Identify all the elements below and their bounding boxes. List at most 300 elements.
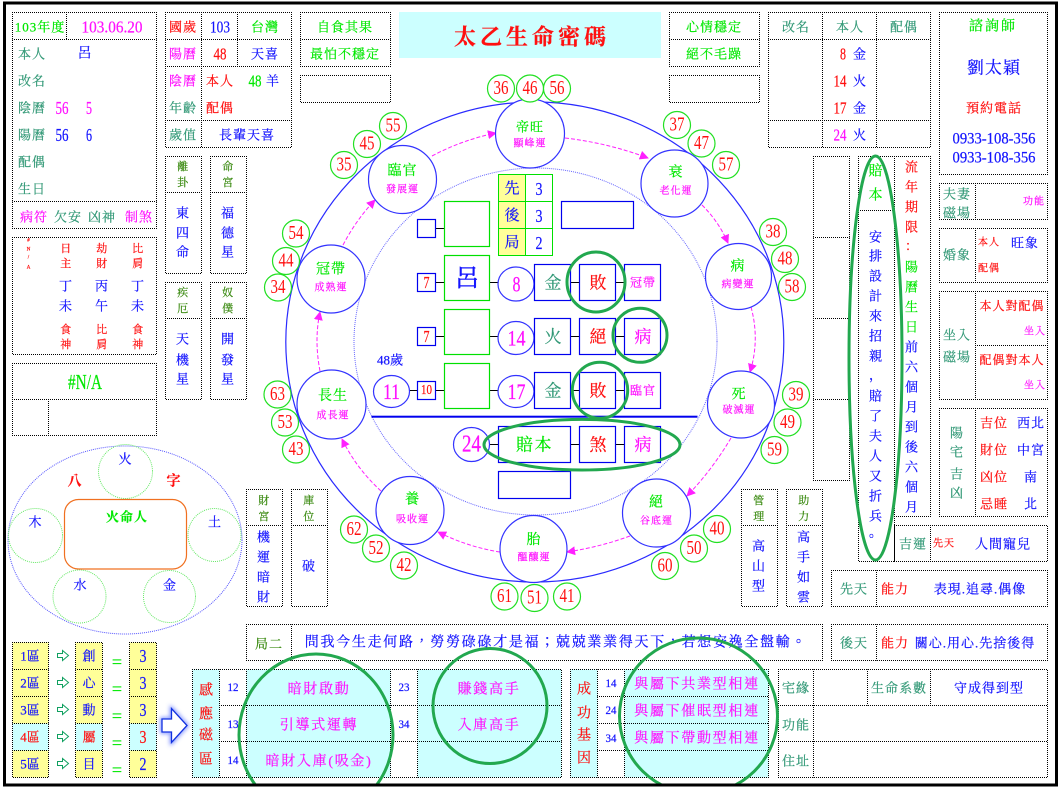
row: 48歲 11 10 17 金 敗 臨官 [374, 352, 660, 408]
panel: 離卦: 卦 [177, 175, 189, 189]
chart: five elements: 土 [208, 514, 222, 530]
row: 48歲 11 10 17 金 敗 臨官: 48歲 [377, 352, 403, 368]
panel: 自食其果: 自食其果 [317, 20, 373, 34]
highlight ovals center [484, 252, 680, 470]
panel: annual period [894, 156, 930, 516]
empty box under row [498, 472, 570, 498]
table: response magnetic zone: 磁 [199, 728, 214, 744]
panel: 助力: 高 [797, 530, 811, 544]
panel: couple field: 夫妻 [943, 186, 971, 202]
panel: innate ability [832, 570, 1048, 606]
panel: consultant: 預約電話 [966, 100, 1022, 116]
panel: lose capital verdict [858, 156, 894, 562]
panel: 疾厄: 天 [176, 332, 190, 346]
table: zones: 心 [82, 676, 96, 690]
panel: life poem: 局二 [255, 636, 283, 652]
panel: acquired ability: 後天 [840, 636, 868, 650]
icon: big blue arrow [162, 708, 187, 742]
panel: personal info: 6 [86, 125, 92, 145]
panel: personal info: 制煞 [125, 210, 153, 224]
panel: 庫位: 位 [303, 510, 315, 523]
panel: four pillars: 劫 [96, 241, 108, 255]
panel: acquired ability: 關心.用心.先捨後得 [915, 636, 1035, 650]
panel: innate ability: 表現.追尋.偶像 [934, 582, 1026, 596]
age number badges: 34 [270, 276, 286, 298]
panel: house luck: 吉 [950, 466, 964, 482]
panel: lose capital verdict: 親 [869, 348, 883, 364]
table: zones: 3 [140, 673, 146, 693]
panel: 心情穩定: 心情穩定 [686, 20, 742, 34]
panel: 奴僕: 僕 [222, 301, 234, 315]
stage: 病: 病變運 [722, 278, 754, 290]
panel: lose capital verdict: 人 [869, 448, 883, 464]
panel: 財宮: 機 [257, 530, 271, 544]
table: zones: = [112, 706, 122, 726]
panel: annual period: 期 [905, 200, 919, 214]
row: 呂 8 金 敗 冠帶: 敗 [590, 274, 606, 292]
age number badges: 61 [497, 585, 512, 607]
panel: personal info: 陰曆 [18, 100, 46, 116]
stage: 長生: 長生 [318, 387, 348, 404]
panel: annual period: 月 [905, 500, 919, 514]
panel: entry field [940, 292, 1048, 400]
table: house and life coefficient [778, 670, 1048, 778]
panel: 命宮: 宮 [222, 176, 234, 189]
table: response magnetic zone: 13 [228, 717, 238, 731]
age number badges: 53 [278, 411, 292, 433]
panel: four pillars: 主 [60, 257, 72, 270]
stage: 絕: 谷底運 [640, 514, 673, 527]
age number badges: 57 [718, 154, 734, 176]
panel: 管理: 高 [752, 538, 766, 554]
chart: five elements: 火命人 [106, 510, 148, 524]
panel: personal info: 欠安 [54, 210, 82, 224]
panel: annual period: 流 [905, 160, 919, 174]
panel: acquired ability: 能力 [881, 636, 909, 650]
panel: lose capital verdict: 又 [869, 468, 883, 484]
panel: name numbers table: 金 [853, 100, 867, 116]
panel: 離卦: 命 [176, 244, 190, 260]
row: 呂 8 金 敗 冠帶: 金 [544, 274, 562, 292]
panel: lose capital verdict: 設 [869, 268, 883, 284]
table: 先後局: 局 [504, 234, 520, 251]
panel: 命宮: 命 [222, 159, 234, 173]
panel: lose capital verdict: 計 [869, 288, 883, 304]
panel: 心情穩定 [670, 12, 760, 66]
table: zones: 創 [82, 648, 96, 664]
table: house and life coefficient: 生命系數 [871, 680, 927, 696]
row: 14 火 絕 病: 火 [544, 328, 562, 346]
row: 24 賠本 煞 病: 24 [462, 432, 481, 458]
stage: 絕: 絕 [649, 494, 664, 510]
panel: acquired ability [832, 624, 1048, 660]
panel: four pillars: 財 [96, 256, 108, 270]
row: 24 賠本 煞 病: 賠本 [516, 434, 553, 454]
stage: 養: 養 [405, 492, 420, 508]
panel: name numbers table: 火 [853, 128, 867, 142]
panel: 離卦 [166, 156, 202, 274]
panel: four pillars: 肩 [96, 337, 108, 351]
stage: 臨官 [368, 146, 436, 214]
panel: personal info: 改名 [18, 74, 46, 88]
panel: entry field: 配偶對本人 [979, 352, 1045, 367]
panel: year and age: 年齡 [169, 100, 197, 116]
table: success genes [570, 670, 768, 778]
panel: personal info: 56 [56, 125, 68, 145]
panel: lose capital verdict: 排 [869, 248, 883, 264]
panel: year and age: 陰曆 [169, 74, 197, 88]
table: success genes: 與屬下帶動型相連 [634, 730, 760, 746]
panel: lose capital verdict: 兵 [869, 508, 883, 524]
row: 14 火 絕 病: 14 [508, 326, 526, 350]
row: 48歲 11 10 17 金 敗 臨官: 臨官 [630, 382, 656, 398]
panel: couple field [940, 184, 1048, 220]
age number badges: 40 [710, 518, 724, 540]
table: response magnetic zone: 區 [199, 752, 213, 768]
chart: five elements: 字 [166, 474, 182, 490]
panel: 命宮: 福 [221, 206, 235, 220]
panel: annual period: 日 [905, 320, 919, 334]
table: 先後局: 3 [536, 206, 542, 226]
panel: house luck: 中宮 [1017, 442, 1045, 458]
stage: 病 [706, 244, 772, 310]
highlight ovals bottom and right [239, 156, 902, 789]
row: 14 火 絕 病: 7 [424, 327, 430, 346]
row: 48歲 11 10 17 金 敗 臨官: 金 [544, 382, 562, 400]
panel: annual period: 曆 [905, 280, 919, 294]
panel: empty column [814, 156, 850, 480]
panel: 命宮: 星 [221, 244, 235, 260]
panel: year and age: 天喜 [251, 46, 279, 62]
empty box left [300, 76, 390, 102]
panel: 疾厄: 厄 [177, 302, 189, 315]
panel: lose capital verdict: 來 [869, 308, 883, 324]
panel: lose capital verdict: 折 [869, 488, 883, 504]
age number badges: 44 [278, 250, 294, 272]
table: response magnetic zone: 23 [398, 680, 410, 694]
table: success genes: 基 [577, 726, 591, 744]
panel: 助力: 如 [797, 570, 811, 584]
table: response magnetic zone: 入庫高手 [458, 716, 520, 734]
panel: house luck: 財位 [980, 442, 1008, 458]
panel: annual period: 到 [905, 420, 919, 434]
table: response magnetic zone [192, 670, 562, 778]
age number badges: 55 [386, 114, 400, 136]
stage: 死 [708, 371, 774, 438]
title [399, 12, 661, 58]
age number badges: 58 [784, 276, 800, 298]
panel: 財宮: 運 [257, 550, 271, 564]
panel: 疾厄: 機 [176, 352, 190, 368]
stage: 衰 [641, 150, 708, 217]
age number badges: 41 [560, 585, 574, 607]
panel: N/A [12, 364, 156, 436]
panel: 命宮 [210, 156, 246, 274]
panel: personal info [12, 12, 156, 228]
panel: year and age: 配偶 [206, 100, 234, 116]
panel: personal info: 103.06.20 [82, 18, 142, 36]
stage: 帝旺: 顯峰運 [514, 136, 546, 150]
row: 14 火 絕 病: 病 [634, 328, 652, 346]
panel: lose capital verdict: 。 [869, 524, 883, 540]
panel: house luck: 忌睡 [980, 496, 1008, 512]
age number badges: 46 [522, 77, 538, 99]
panel: marriage [940, 228, 1048, 282]
row: 呂 8 金 敗 冠帶: 呂 [455, 266, 479, 292]
panel: annual period: ： [905, 238, 919, 254]
row: 24 賠本 煞 病: 煞 [590, 436, 608, 454]
panel: entry field: 坐入 [1024, 324, 1046, 338]
stage: 衰: 衰 [668, 164, 684, 180]
panel: 奴僕: 星 [221, 372, 235, 386]
panel: house luck: 西北 [1017, 416, 1045, 430]
table: house and life coefficient: 守成得到型 [954, 680, 1024, 696]
age number badges: 35 [336, 154, 352, 176]
panel: 疾厄: 疾 [177, 285, 189, 299]
panel: personal info: 呂 [78, 46, 92, 62]
panel: four pillars: 比 [96, 322, 108, 336]
panel: 庫位: 破 [302, 558, 316, 574]
panel: annual period: 年 [905, 180, 919, 194]
panel: entry field: 本人對配偶 [979, 298, 1045, 313]
panel: consultant: 0933-108-356 [952, 150, 1036, 166]
panel: 自食其果: 最怕不穩定 [310, 46, 380, 62]
panel: annual period: 後 [905, 440, 919, 454]
panel: four pillars: 丙 [95, 278, 109, 294]
panel: 庫位: 庫 [303, 494, 315, 507]
age number badges: 45 [360, 132, 374, 154]
age number badges: 36 [494, 77, 508, 99]
stage: 病: 病 [730, 258, 746, 274]
panel: year and age [166, 12, 292, 148]
panel: four pillars: 丁 [59, 278, 73, 294]
panel: year and age: 國歲 [169, 20, 197, 34]
panel: name numbers table: 金 [853, 46, 867, 62]
row: 48歲 11 10 17 金 敗 臨官: 敗 [590, 382, 606, 400]
panel: lose capital verdict: 賠 [868, 162, 884, 180]
panel: 財宮: 財 [258, 493, 270, 507]
panel: innate ability: 能力 [881, 582, 909, 596]
panel: personal info: 凶神 [88, 210, 116, 224]
divider line [372, 416, 698, 418]
age number badges: 37 [670, 114, 684, 136]
table: zones: = [112, 652, 122, 672]
stage: 胎: 醞釀運 [518, 550, 550, 564]
table: zones: = [112, 733, 122, 753]
row: 呂 8 金 敗 冠帶: 冠帶 [630, 274, 656, 290]
panel: 管理: 山 [752, 558, 766, 574]
panel: year and age: 台灣 [251, 20, 279, 34]
panel: four pillars: # [27, 238, 31, 244]
table: 先後局: 先 [504, 180, 520, 197]
table: zones: = [112, 760, 122, 780]
panel: lose capital verdict: 了 [869, 408, 883, 424]
panel: four pillars: / [28, 256, 30, 260]
table: zones: 1區 [20, 648, 40, 664]
table: zones: = [112, 679, 122, 699]
panel: house luck: 宅 [950, 444, 964, 460]
table: success genes: 14 [606, 676, 616, 690]
table: 先後局: 3 [536, 179, 542, 199]
panel: marriage: 配偶 [978, 262, 1000, 274]
chart: five elements: 水 [73, 578, 88, 592]
age number badges: 48 [778, 248, 792, 270]
stage: 胎: 胎 [526, 532, 542, 548]
panel: lose capital verdict: 招 [869, 328, 883, 344]
stage: 帝旺 [496, 99, 564, 168]
table: zones: 3 [140, 700, 146, 720]
panel: consultant: 劉太穎 [967, 58, 1021, 78]
panel: consultant [940, 12, 1048, 174]
panel: 奴僕 [210, 282, 246, 400]
stage: 長生 [297, 370, 366, 439]
panel: 自食其果 [300, 12, 390, 66]
row: 48歲 11 10 17 金 敗 臨官: 17 [508, 379, 526, 404]
panel: year and age: 歲值 [169, 128, 197, 142]
panel: name numbers table: 14 [834, 72, 847, 90]
panel: four pillars: 比 [132, 241, 144, 255]
panel: 管理: 型 [752, 578, 766, 594]
row: 48歲 11 10 17 金 敗 臨官: 11 [383, 379, 400, 404]
panel: 助力: 力 [798, 509, 810, 523]
panel: four pillars: A [27, 266, 31, 270]
panel: lose capital verdict: 本 [868, 186, 884, 204]
empty box right [670, 76, 760, 102]
panel: 助力: 手 [797, 550, 811, 564]
stage: 冠帶 [297, 245, 365, 313]
chart: five elements: 八 [68, 474, 82, 490]
row: 14 火 絕 病: 絕 [590, 328, 606, 346]
row: 呂 8 金 敗 冠帶: 8 [512, 272, 520, 296]
panel: couple field: 功能 [1023, 194, 1045, 208]
panel: house luck: 北 [1024, 496, 1038, 512]
panel: lose capital verdict: 賠 [869, 388, 883, 404]
panel: four pillars: 食 [132, 322, 144, 336]
panel: 離卦: 東 [176, 206, 190, 220]
table: success genes: 因 [577, 750, 591, 766]
table: success genes: 成 [577, 680, 591, 698]
panel: name numbers table: 火 [853, 74, 867, 88]
stage: 衰: 老化運 [660, 184, 692, 197]
panel: personal info: 本人 [18, 46, 46, 62]
panel: year and age: 48 [214, 44, 226, 64]
age number badges: 54 [288, 222, 304, 244]
panel: name numbers table [768, 12, 930, 148]
panel: name numbers table: 24 [834, 126, 847, 144]
row: 48歲 11 10 17 金 敗 臨官: 10 [421, 383, 432, 398]
table: zones: 目 [82, 756, 96, 772]
panel: 奴僕: 開 [221, 332, 235, 346]
table: zones: 2 [140, 754, 146, 774]
age number badges: 50 [686, 537, 702, 559]
panel: lucky fortune: 先天 [933, 536, 955, 550]
panel: lose capital verdict: 安 [869, 230, 883, 244]
table: zones: 2區 [20, 676, 40, 690]
table: response magnetic zone: 34 [398, 717, 410, 731]
panel: annual period: 陽 [905, 260, 919, 274]
diagram: life cycle wheel [264, 75, 810, 612]
panel: four pillars: 日 [60, 242, 72, 255]
stage: 冠帶: 冠帶 [316, 262, 346, 278]
stage: 絕 [622, 479, 690, 547]
row: 14 火 絕 病 [418, 310, 660, 354]
panel: 庫位 [292, 490, 328, 606]
panel: entry field: 磁場 [943, 350, 971, 364]
panel: 奴僕: 奴 [222, 286, 234, 299]
chart: five elements: 火 [118, 452, 133, 466]
table: house and life coefficient: 宅緣 [782, 680, 810, 696]
age number badges: 39 [788, 384, 804, 406]
panel: 離卦: 四 [176, 226, 190, 240]
panel: consultant: 0933-108-356 [952, 130, 1036, 148]
age number badges: 56 [550, 77, 564, 99]
table: zones: 3 [140, 727, 146, 747]
stage: 養 [376, 476, 444, 544]
panel: four pillars: N [27, 248, 31, 252]
panel: 命宮: 德 [221, 226, 235, 240]
panel: annual period: 六 [905, 360, 919, 374]
chart: five elements: 金 [163, 578, 177, 592]
table: zones: 5區 [20, 756, 40, 772]
panel: house luck: 凶 [950, 486, 964, 500]
table: response magnetic zone: 暗財入庫(吸金) [266, 754, 372, 770]
panel: consultant: 諮詢師 [969, 18, 1017, 34]
row: 24 賠本 煞 病 [454, 426, 660, 462]
panel: 財宮 [246, 490, 282, 606]
panel: four pillars: 未 [131, 298, 145, 314]
panel: annual period: 前 [905, 340, 919, 354]
title: 太乙生命密碼 [454, 24, 610, 50]
panel: N/A: #N/A [68, 370, 103, 394]
panel: four pillars: 丁 [131, 278, 145, 294]
table: zones: 3區 [20, 702, 40, 718]
panel: personal info: 56 [56, 98, 68, 118]
table: zones: 屬 [82, 730, 96, 744]
age number badges: 38 [766, 220, 780, 242]
table: success genes: 24 [606, 703, 616, 717]
panel: 離卦: 離 [177, 159, 189, 173]
table: response magnetic zone: 賺錢高手 [458, 680, 520, 698]
panel: annual period: 限 [905, 220, 919, 234]
panel: 助力: 助 [798, 493, 810, 507]
panel: four pillars: 未 [59, 298, 73, 314]
panel: personal info: 103年度 [15, 20, 65, 34]
table: house and life coefficient: 功能 [782, 718, 810, 732]
table: response magnetic zone: 引導式運轉 [280, 716, 358, 734]
panel: couple field: 磁場 [943, 206, 971, 220]
outer ring [286, 102, 784, 582]
panel: name numbers table: 改名 [782, 20, 810, 34]
table: 先後局: 後 [504, 207, 520, 224]
panel: lucky fortune [894, 526, 1048, 562]
age number badges: 47 [694, 132, 709, 154]
panel: annual period: 生 [905, 300, 919, 314]
panel: 財宮: 暗 [257, 570, 271, 584]
panel: year and age: 羊 [266, 74, 280, 88]
table: response magnetic zone: 14 [228, 753, 238, 767]
panel: annual period: 月 [905, 400, 919, 414]
table: house and life coefficient: 住址 [782, 754, 810, 768]
panel: house luck: 吉位 [980, 416, 1008, 430]
stage: 長生: 成長運 [316, 408, 350, 422]
panel: personal info: 生日 [18, 182, 46, 196]
stage: 死: 死 [732, 386, 746, 402]
panel: life poem [246, 624, 822, 660]
panel: lose capital verdict: ， [869, 368, 883, 384]
panel: year and age: 長輩天喜 [219, 128, 275, 142]
table: 先後局 [498, 174, 552, 256]
row: 呂 8 金 敗 冠帶: 7 [424, 273, 430, 292]
